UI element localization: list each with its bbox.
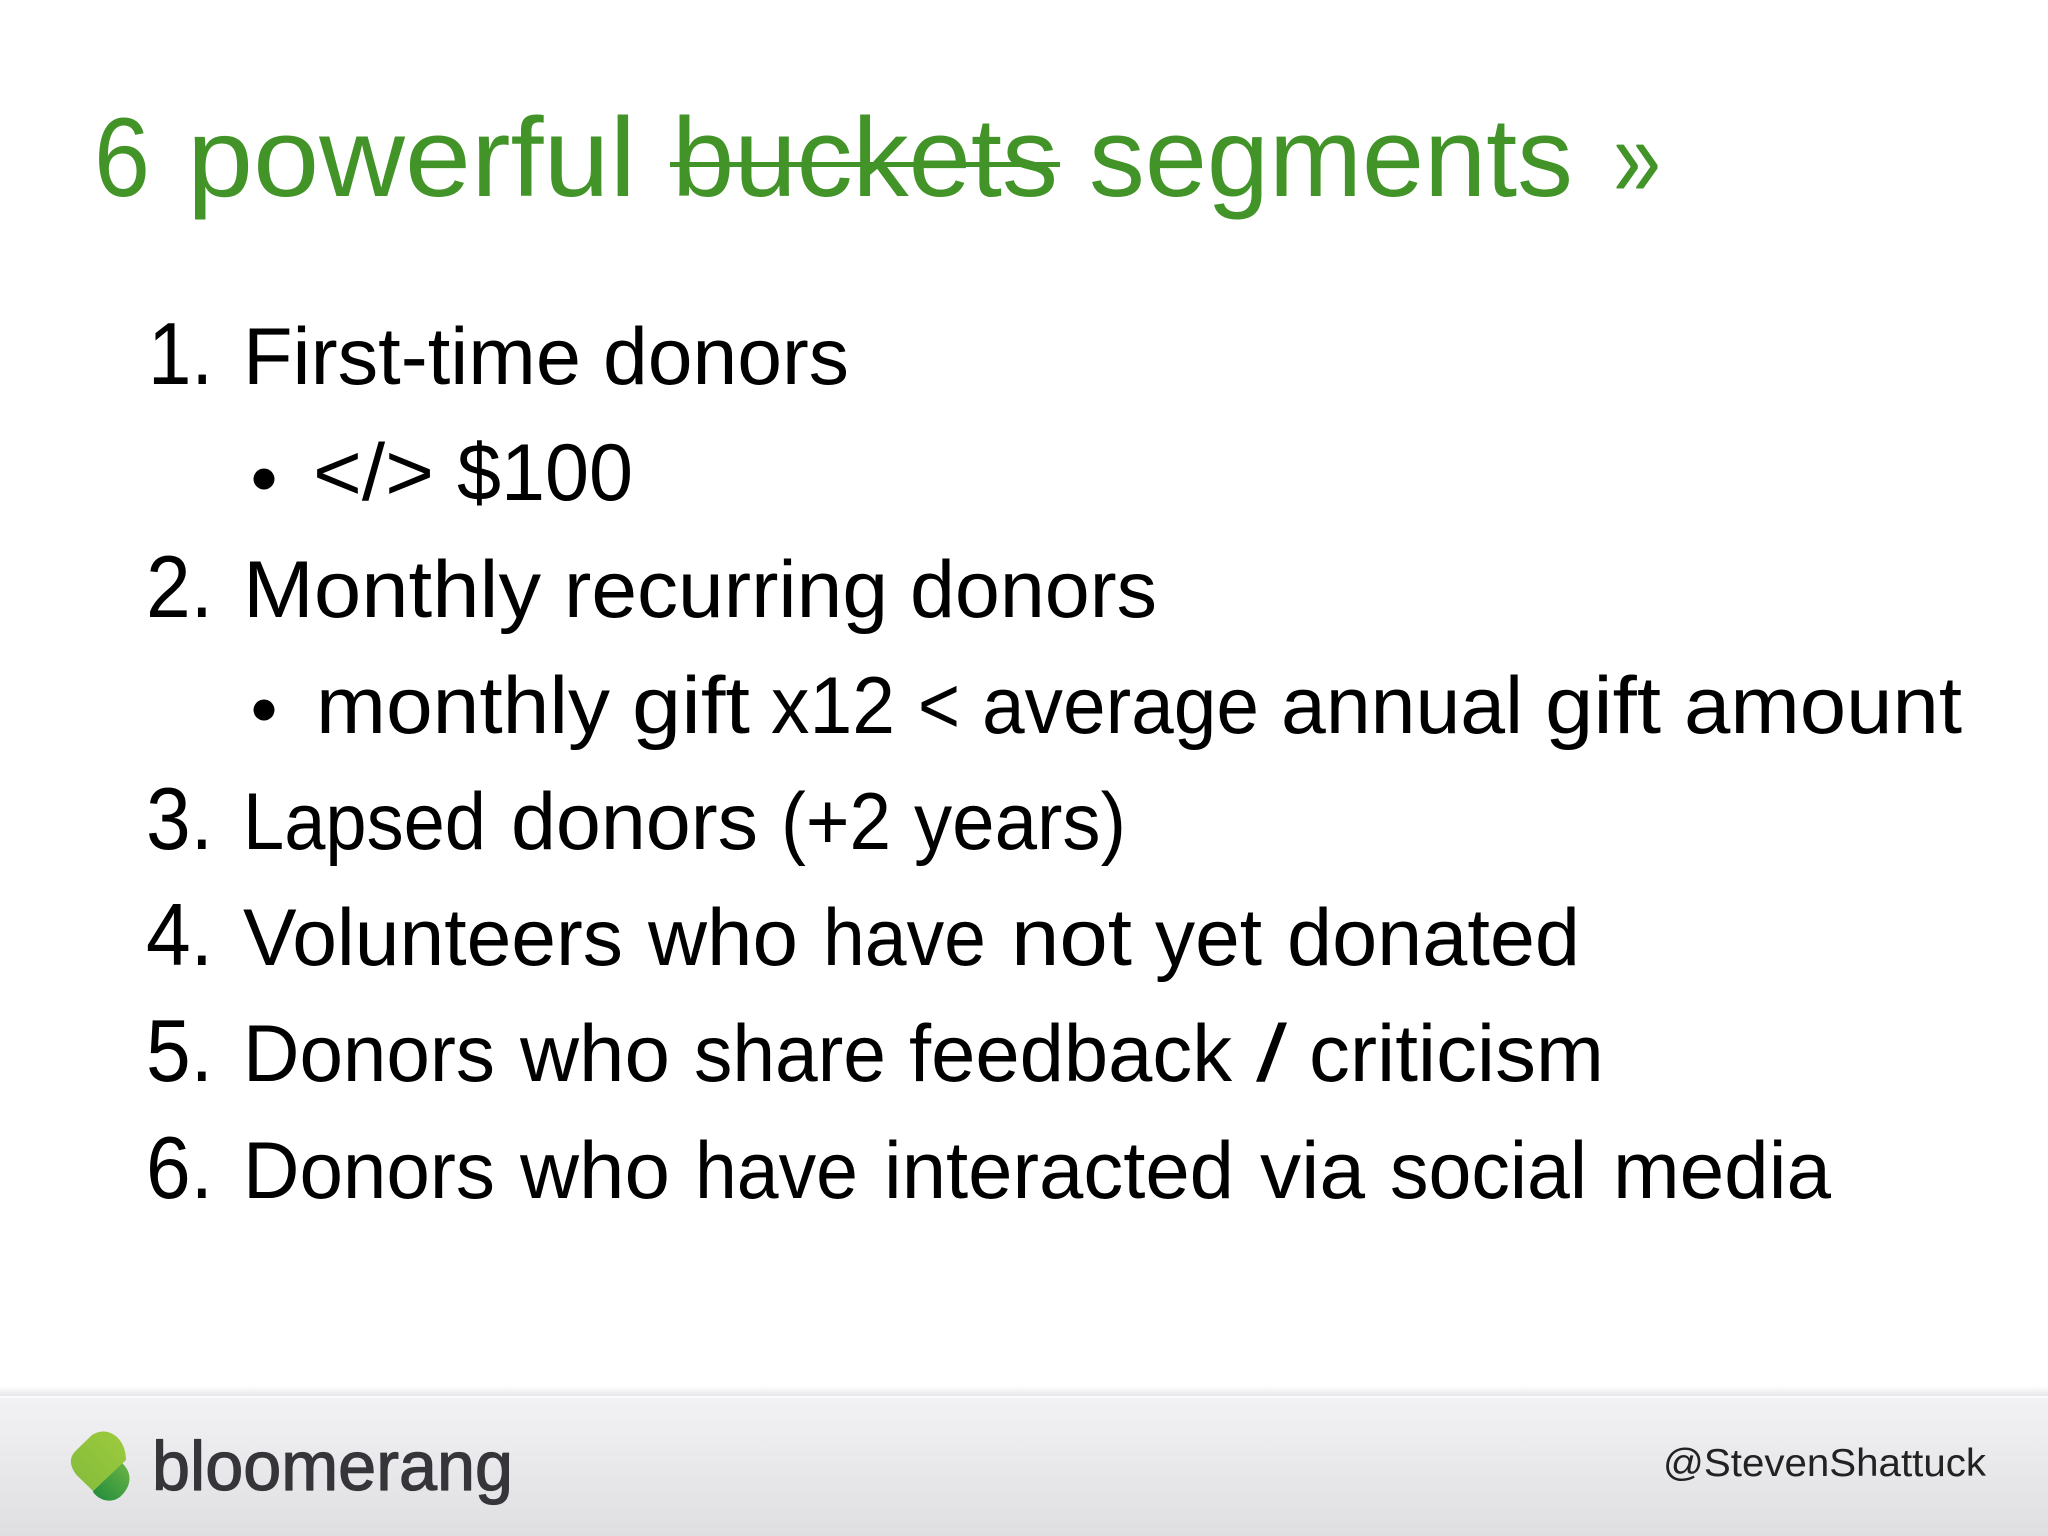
- item 3: lapsed donors: [146, 769, 1126, 868]
- item 6: social media donors: social: [1390, 1126, 1587, 1216]
- item 5: feedback donors: criticism: [1309, 1009, 1604, 1099]
- title: buckets: [672, 95, 1058, 220]
- item 5: feedback donors: Donors: [243, 1009, 495, 1099]
- item 4: volunteers: Volunteers: [243, 893, 623, 983]
- item 3: lapsed donors: 3.: [146, 769, 213, 868]
- item 6: social media donors: Donors: [243, 1126, 495, 1216]
- item 4: volunteers: 4.: [146, 885, 213, 984]
- bullet: monthly gift rule: gift: [1545, 661, 1661, 751]
- title: 6: [94, 95, 150, 220]
- bullet: monthly gift rule: <: [918, 661, 960, 751]
- item 1: first-time donors: First-time: [243, 312, 581, 402]
- item 6: social media donors: media: [1613, 1126, 1832, 1216]
- bullet: monthly gift rule: amount: [1684, 661, 1962, 751]
- item 5: feedback donors: 5.: [146, 1001, 213, 1100]
- bullet: under $100: [254, 428, 633, 518]
- item 6: social media donors: via: [1260, 1126, 1366, 1216]
- item 4: volunteers: not: [1011, 893, 1132, 983]
- numbered list of segments: [146, 304, 1962, 1217]
- item 4: volunteers: who: [647, 893, 798, 983]
- bullet: under $100: </>: [313, 428, 434, 518]
- title: »: [1613, 95, 1661, 220]
- title: powerful: [187, 95, 636, 220]
- bullet: monthly gift rule: annual: [1281, 661, 1523, 751]
- item 4: volunteers: yet: [1155, 893, 1262, 983]
- item 3: lapsed donors: Lapsed: [243, 777, 486, 867]
- item 6: social media donors: interacted: [884, 1126, 1234, 1216]
- item 2: monthly recurring donors: Monthly: [243, 545, 542, 635]
- item 2: monthly recurring donors: donors: [910, 545, 1157, 635]
- item 3: lapsed donors: donors: [511, 777, 758, 867]
- title: segments: [1089, 95, 1573, 220]
- item 5: feedback donors: share: [694, 1009, 886, 1099]
- bullet: under $100: $100: [457, 428, 633, 518]
- title: [94, 95, 1661, 220]
- bullet: monthly gift rule: average: [982, 661, 1259, 751]
- item 2: monthly recurring donors: recurring: [564, 545, 888, 635]
- item 5: feedback donors: who: [519, 1009, 670, 1099]
- logo wordmark: bloomerang: [152, 1427, 513, 1505]
- item 4: volunteers: have: [823, 893, 986, 983]
- item 6: social media donors: [146, 1118, 1832, 1217]
- item 1: first-time donors: donors: [603, 312, 849, 402]
- item 3: lapsed donors: years): [914, 777, 1126, 867]
- item 1: first-time donors: 1.: [148, 304, 213, 403]
- item 2: monthly recurring donors: [146, 537, 1157, 636]
- item 6: social media donors: have: [695, 1126, 858, 1216]
- item 4: volunteers: [146, 885, 1580, 984]
- bullet: monthly gift rule: x12: [771, 661, 895, 751]
- footer bar: [0, 1386, 2048, 1536]
- item 3: lapsed donors: (+2: [781, 777, 891, 867]
- icon: bloomerang logo mark: [71, 1431, 130, 1501]
- item 2: monthly recurring donors: 2.: [146, 537, 213, 636]
- item 1: first-time donors: [148, 304, 849, 403]
- item 5: feedback donors: feedback: [909, 1009, 1232, 1099]
- bullet: monthly gift rule: gift: [632, 661, 750, 751]
- bullet: monthly gift rule: [254, 661, 1962, 751]
- item 5: feedback donors: [146, 1001, 1604, 1100]
- item 5: feedback donors: /: [1256, 1009, 1288, 1099]
- item 6: social media donors: who: [519, 1126, 670, 1216]
- item 6: social media donors: 6.: [146, 1118, 213, 1217]
- bullet: monthly gift rule: monthly: [316, 661, 611, 751]
- item 4: volunteers: donated: [1287, 893, 1580, 983]
- twitter handle: @StevenShattuck: [1663, 1442, 1987, 1485]
